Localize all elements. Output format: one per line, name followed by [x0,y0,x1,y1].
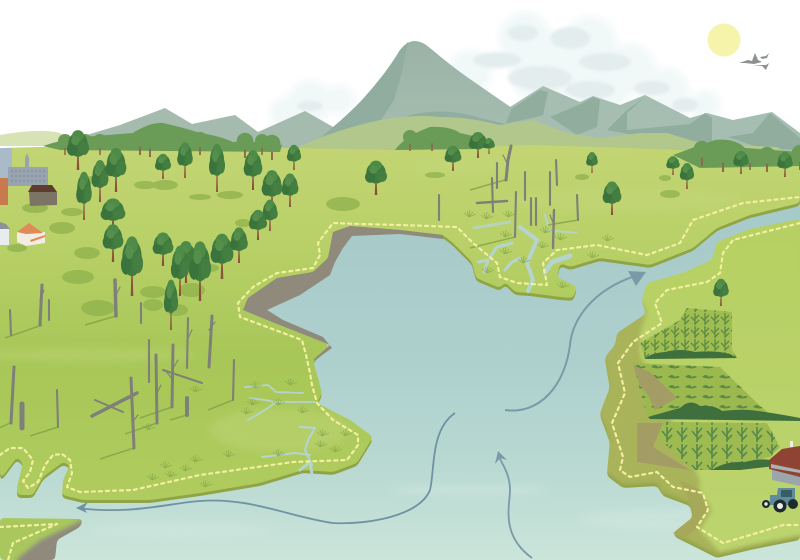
land edge shadow [0,148,800,503]
orange block [0,178,8,205]
right range [470,86,800,160]
back treeline left [43,123,282,160]
sun [708,24,740,56]
back treeline right [673,140,800,172]
tree shadows [7,172,680,316]
water current arrow: north [495,451,532,558]
walking trail dotted [0,197,800,560]
birds [739,53,769,70]
streams in south marsh [245,385,315,474]
castle windows [11,171,45,181]
farmhouse [769,441,800,486]
dead tree shadows [0,180,578,459]
buildings: city [0,148,57,246]
water [0,200,800,560]
hedge [648,402,800,421]
grass tufts [143,210,614,487]
right river-bank land [600,219,800,558]
orange-roof house [17,232,45,246]
grey lake shore [243,226,443,360]
mountains [80,41,800,160]
field tone bands [0,157,740,452]
castle [8,153,48,186]
hedge [645,350,737,359]
tractor [762,488,798,512]
dead trees [10,146,578,448]
brown soil strip [673,480,708,540]
water current arrow: west [76,413,455,523]
water highlights [90,484,800,538]
north land [0,145,800,500]
clouds [270,12,720,127]
crop field: tall maize [637,422,780,470]
far left range [80,108,400,150]
eroded soil [633,365,677,410]
white house [0,229,9,245]
crop field: vegetables [633,363,800,421]
central peak [315,41,512,142]
streams in delta [474,215,577,291]
water current arrow: east [505,271,646,411]
brown house [29,192,57,206]
eroded soil [637,423,690,470]
south-west land [0,518,84,560]
blue tower [0,148,12,181]
crop field: maize top [640,308,737,359]
fallen logs [92,393,137,416]
hedge [712,459,775,470]
background hills [0,116,790,155]
back treeline centre [395,127,478,151]
sky [0,0,800,200]
broadleaf trees [67,130,793,330]
